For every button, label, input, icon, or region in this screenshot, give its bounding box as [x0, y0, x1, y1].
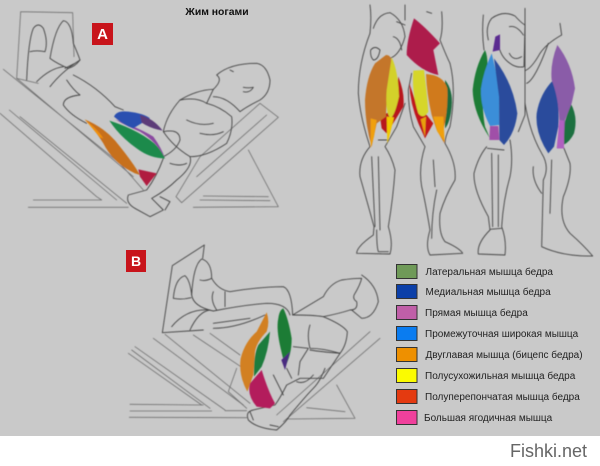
legend item: semimembranosus: Полуперепончатая мышца бедра [425, 391, 580, 403]
legend item: semimembranosus [396, 390, 580, 404]
muscles front view [473, 34, 517, 145]
muscle: rectus top [140, 115, 163, 131]
watermark: Fishki.net [510, 441, 587, 461]
muscle: gluteus [249, 370, 275, 408]
muscle: vastus lateralis [445, 80, 452, 128]
muscle: vastus lateralis [278, 308, 292, 367]
muscle: vastus lateralis [109, 121, 165, 158]
badge A: A [97, 26, 108, 43]
legend item: biceps [396, 348, 583, 362]
muscles B [240, 308, 292, 408]
muscle: biceps femoris [240, 312, 268, 392]
muscles A [85, 111, 165, 186]
machine frame A [0, 12, 278, 207]
muscle: rectus femoris [281, 352, 290, 370]
muscle: biceps femoris [426, 74, 447, 143]
muscles back view right [407, 18, 452, 143]
muscle: semitendinosus [386, 57, 399, 118]
legend item: lateral: Латеральная мышца бедра [426, 266, 553, 278]
back view left leg outline [357, 5, 405, 254]
legend item: medial [396, 284, 551, 298]
machine frame B [128, 332, 380, 422]
muscle: gluteus [138, 169, 157, 186]
legend item: rectus [396, 306, 528, 320]
athlete outline A [27, 21, 270, 217]
legend item: gluteus: Большая ягодичная мышца [424, 413, 553, 424]
muscle: medial vastus [114, 111, 150, 128]
legend [396, 264, 583, 424]
muscle: vastus medialis [494, 58, 517, 145]
legend item: semitendinosus [396, 368, 576, 382]
illustration: leg press position B [128, 245, 380, 430]
foot plate and legs B [162, 245, 293, 333]
legend item: biceps: Двуглавая мышца (бицепс бедра) [426, 349, 583, 361]
muscle: medial vastus [536, 80, 559, 153]
muscle: biceps femoris [85, 119, 140, 175]
muscle: rectus femoris [551, 45, 575, 148]
muscle: semimembranosus [409, 83, 433, 138]
back view right leg outline [408, 12, 463, 255]
side view leg outline [525, 23, 593, 256]
badge B [126, 250, 146, 272]
legend item: intermediate [396, 326, 579, 340]
muscle: vastus intermedius [481, 53, 499, 126]
legend item: rectus: Прямая мышца бедра [425, 307, 528, 319]
front view leg outline [474, 8, 525, 255]
legend item: semitendinosus: Полусухожильная мышца бедра [425, 370, 576, 382]
title: Жим ногами [184, 7, 249, 18]
muscle: gluteus maximus [407, 18, 440, 75]
badge B: B [131, 253, 141, 269]
muscle: vastus lateralis [563, 103, 576, 145]
muscle: biceps femoris [365, 55, 392, 147]
legend item: intermediate: Промежуточная широкая мышца [425, 329, 579, 340]
badge A [92, 23, 113, 45]
muscle: hip flexor [493, 34, 500, 52]
muscle: vastus lateralis inner [254, 332, 270, 377]
muscle: rectus femoris [115, 119, 165, 158]
muscle: vastus lateralis [473, 50, 490, 138]
illustration: four leg anatomy views [357, 5, 593, 256]
muscle: rectus femoris tendon [489, 126, 499, 140]
illustration: leg press position A [0, 12, 278, 217]
muscle: semitendinosus [413, 70, 428, 116]
athlete outline B [247, 275, 378, 430]
legend item: gluteus [396, 410, 553, 424]
legend item: lateral [396, 264, 553, 278]
muscles side view [536, 45, 576, 153]
muscle: semimembranosus [380, 77, 404, 133]
legend item: medial: Медиальная мышца бедра [426, 286, 551, 298]
muscles back view left [365, 55, 404, 148]
